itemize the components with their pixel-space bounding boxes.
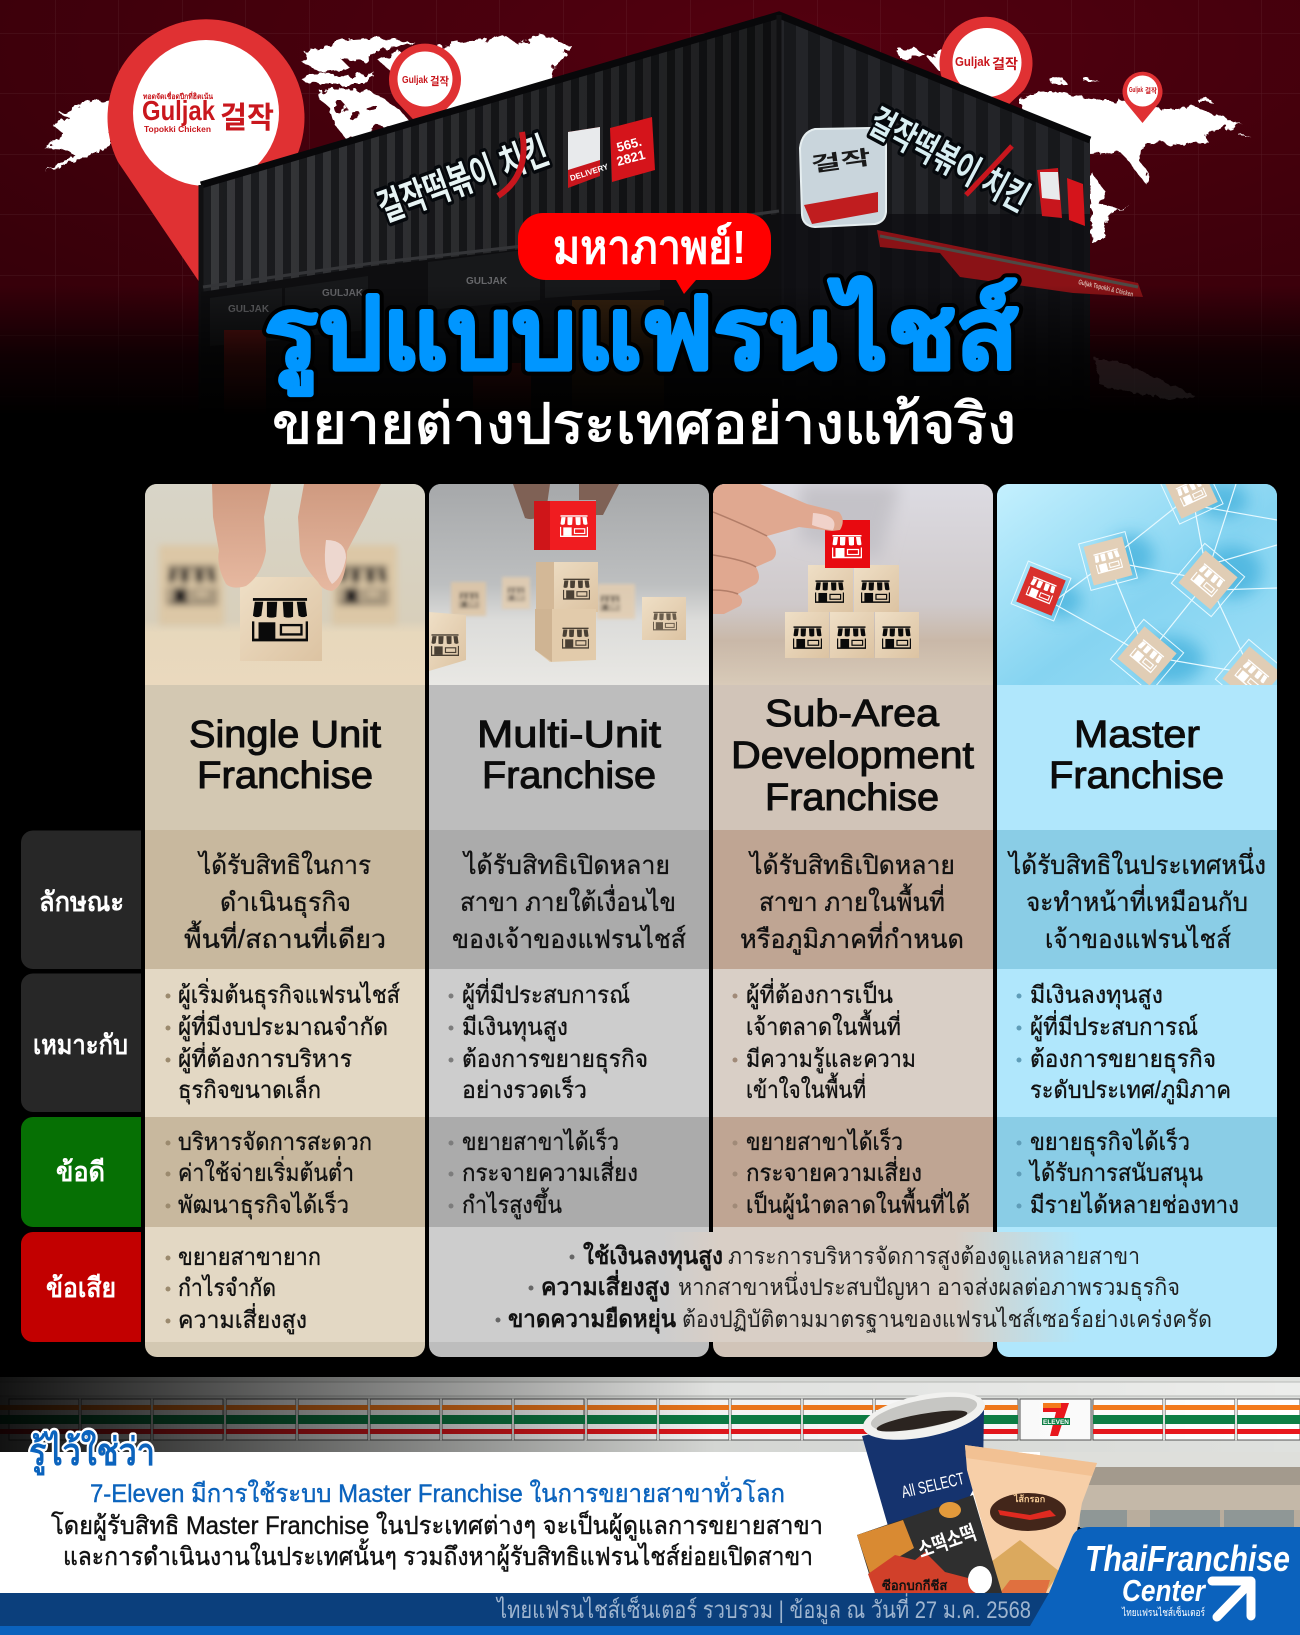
pros list: บริหารจัดการสะดวก xyxy=(178,1129,372,1156)
pros list xyxy=(1016,1127,1239,1219)
panel: Master Franchise column xyxy=(997,460,1289,1357)
info panel: did you know xyxy=(0,1430,1040,1593)
suitable-for list: ระดับประเทศ/ภูมิภาค xyxy=(1030,1077,1231,1105)
pin: large Guljak logo: Guljak xyxy=(142,95,215,126)
suitable-for list: ธุรกิจขนาดเล็ก xyxy=(178,1075,321,1105)
pin: small Guljak logo west: 걸작 xyxy=(430,75,449,88)
pros list: กำไรสูงขึ้น xyxy=(462,1187,562,1220)
right storefront sign: 걸작 xyxy=(809,146,872,177)
cons line 3 xyxy=(496,1306,1212,1335)
panel: Single Unit column xyxy=(145,484,425,1357)
logo: ThaiFranchise Center xyxy=(0,1527,1300,1635)
store building xyxy=(201,15,1143,415)
row label: characteristics xyxy=(21,830,141,969)
pros list: มีรายได้หลายช่องทาง xyxy=(1030,1191,1239,1219)
pin: large Guljak logo: Topokki Chicken xyxy=(144,124,211,134)
store building: GULJAK xyxy=(322,288,364,299)
characteristics text: สาขา ภายในพื้นที่ xyxy=(759,883,945,917)
characteristics text: เจ้าของแฟรนไชส์ xyxy=(1045,924,1231,954)
store building: GULJAK xyxy=(228,304,270,315)
suitable-for list xyxy=(1016,982,1231,1105)
callout: speech bubble xyxy=(518,213,771,294)
pin: large Guljak logo: ทอดจัดเชื่อดปีกที่ฮิตเน้น xyxy=(143,90,214,101)
photo: fingers placing block xyxy=(145,484,425,685)
heading: Master Franchise: Franchise xyxy=(1049,755,1224,797)
info line 3: และการดำเนินงานในประเทศนั้นๆ รวมถึงหาผู้รับสิทธิแฟรนไชส์ย่อยเปิดสาขา xyxy=(63,1538,813,1572)
heading: Master Franchise: Master xyxy=(1074,714,1200,756)
7-Eleven logo xyxy=(1042,1403,1070,1436)
suitable-for list: มีเงินทุนสูง xyxy=(462,1014,568,1042)
product: coffee cup xyxy=(859,1384,989,1526)
right storefront sign: 걸작떡볶이 치킨 xyxy=(862,101,1036,219)
characteristics text: หรือภูมิภาคที่กำหนด xyxy=(740,921,964,955)
pin: medium Guljak logo east: 걸작 xyxy=(992,56,1018,72)
characteristics text xyxy=(740,850,964,955)
suitable-for list: มีเงินลงทุนสูง xyxy=(1030,982,1163,1010)
row label: suitable for xyxy=(21,974,141,1112)
suitable-for list xyxy=(732,978,916,1104)
footer bar: source xyxy=(0,1593,1049,1626)
row label: pros xyxy=(21,1117,141,1227)
map holes xyxy=(335,101,378,120)
pros list xyxy=(166,1129,372,1220)
product: snack pack: ซีอกบกกีชีส xyxy=(882,1578,947,1593)
cons list: ขยายสาขายาก xyxy=(178,1244,321,1271)
pin: tiny Guljak logo: Guljak xyxy=(1129,87,1143,94)
pros list: เป็นผู้นำตลาดในพื้นที่ได้ xyxy=(746,1187,970,1220)
left storefront sign: DELIVERY xyxy=(569,162,610,183)
cons line 2 xyxy=(528,1269,1180,1302)
product: sandwich bag: ไส้กรอก xyxy=(1013,1493,1045,1504)
suitable-for list: ผู้ที่ต้องการเป็น xyxy=(746,978,893,1010)
7-Eleven logo: ELEVEN xyxy=(1043,1419,1069,1426)
pin: small Guljak logo west xyxy=(389,44,461,132)
info line 1: 7-Eleven มีการใช้ระบบ Master Franchise ในการขยายสาขาทั่วโลก xyxy=(90,1476,785,1508)
heading: Multi-Unit Franchise: Franchise xyxy=(482,755,656,797)
heading: Multi-Unit Franchise: Multi-Unit xyxy=(477,714,661,756)
pros list: ได้รับการสนับสนุน xyxy=(1028,1159,1203,1188)
characteristics text xyxy=(1007,847,1266,954)
suitable-for list xyxy=(448,978,648,1104)
merged cons panel for three columns xyxy=(429,1232,1277,1342)
left storefront sign: 걸작떡볶이 치킨 xyxy=(373,130,554,230)
suitable-for list: มีความรู้และความ xyxy=(746,1046,916,1074)
heading: Single Unit Franchise xyxy=(189,714,381,797)
cons line 1 xyxy=(570,1241,1140,1272)
row label: cons: ข้อเสีย xyxy=(46,1273,116,1303)
product: snack pack xyxy=(857,1495,1002,1594)
characteristics text xyxy=(184,850,386,954)
panel: Multi-Unit column xyxy=(429,484,709,1357)
suitable-for list: ต้องการขยายธุรกิจ xyxy=(462,1046,648,1074)
logo: ThaiFranchise Center: ไทยแฟรนไชส์เซ็นเตอร์ xyxy=(1121,1605,1205,1619)
cons line 3: ขาดความยืดหยุ่น xyxy=(508,1306,677,1335)
heading: Sub-Area Development Franchise: Sub-Area xyxy=(765,693,940,735)
red awning xyxy=(877,230,1143,297)
pros list xyxy=(732,1127,970,1220)
row label: cons xyxy=(21,1232,141,1342)
cons list: ความเสี่ยงสูง xyxy=(178,1303,307,1335)
product: sandwich bag xyxy=(965,1445,1097,1593)
heading: Single Unit Franchise: Franchise xyxy=(197,755,373,797)
suitable-for list: ผู้ที่มีประสบการณ์ xyxy=(462,978,630,1010)
suitable-for list xyxy=(166,978,400,1105)
title: รูปแบบแฟรนไชส์ xyxy=(264,277,1018,396)
pros list: ขยายธุรกิจได้เร็ว xyxy=(1030,1127,1190,1157)
suitable-for list: เข้าใจในพื้นที่ xyxy=(746,1072,866,1104)
cons list: กำไรจำกัด xyxy=(178,1274,276,1302)
suitable-for list: ผู้ที่มีงบประมาณจำกัด xyxy=(178,1010,388,1042)
logo: ThaiFranchise Center: Center xyxy=(1122,1573,1207,1608)
store building: GULJAK xyxy=(466,276,508,287)
heading: Sub-Area Development Franchise: Development xyxy=(731,735,974,777)
pin: small Guljak logo west: Guljak xyxy=(402,75,428,86)
heading: Sub-Area Development Franchise: Franchise xyxy=(765,777,939,819)
store building: Guljak Topokki & Chicken xyxy=(1078,279,1134,299)
pros list: ขยายสาขาได้เร็ว xyxy=(746,1127,903,1156)
product: coffee cup: All SELECT xyxy=(900,1469,966,1502)
pin: tiny Guljak logo: 걸작 xyxy=(1145,86,1158,95)
pin: medium Guljak logo east: Guljak xyxy=(955,54,991,69)
callout: speech bubble: มหาภาพย์! xyxy=(553,221,746,273)
photo: hand stacking pyramid of blocks xyxy=(713,484,993,662)
pros list: กระจายความเสี่ยง xyxy=(462,1156,638,1187)
store lower facade xyxy=(1030,1452,1300,1467)
cons list xyxy=(166,1244,321,1335)
pin: medium Guljak logo east xyxy=(940,17,1032,126)
suitable-for list: อย่างรวดเร็ว xyxy=(462,1075,587,1104)
characteristics text: พื้นที่/สถานที่เดียว xyxy=(184,920,386,954)
hero fade to black xyxy=(0,285,1300,415)
suitable-for list: ผู้เริ่มต้นธุรกิจแฟรนไชส์ xyxy=(178,978,400,1010)
heading: Master Franchise xyxy=(1049,714,1224,797)
characteristics text: ของเจ้าของแฟรนไชส์ xyxy=(452,924,686,954)
photo: stacked blocks xyxy=(429,484,709,685)
footer bar: source: ไทยแฟรนไชส์เซ็นเตอร์ รวบรวม | ข้อมูล ณ วันที่ 27 ม.ค. 2568 xyxy=(495,1593,1031,1625)
pros list: กระจายความเสี่ยง xyxy=(746,1156,922,1187)
footer photo: 7-Eleven store fascia xyxy=(0,1377,1300,1528)
characteristics text: จะทำหน้าที่เหมือนกับ xyxy=(1026,884,1248,917)
pros list: พัฒนาธุรกิจได้เร็ว xyxy=(178,1190,349,1220)
photo: network of blocks xyxy=(997,484,1277,685)
cons line 1: ภาระการบริหารจัดการสูงต้องดูแลหลายสาขา xyxy=(728,1243,1140,1270)
info line 2: โดยผู้รับสิทธิ Master Franchise ในประเทศต่างๆ จะเป็นผู้ดูแลการขยายสาขา xyxy=(51,1510,823,1541)
characteristics text: ได้รับสิทธิเปิดหลาย xyxy=(462,850,670,880)
characteristics text: สาขา ภายใต้เงื่อนไข xyxy=(460,884,676,917)
cons line 2: ความเสี่ยงสูง xyxy=(541,1269,670,1302)
pin: large Guljak logo: 걸작 xyxy=(220,102,274,135)
row label: suitable for: เหมาะกับ xyxy=(33,1030,128,1060)
left storefront sign: 565. xyxy=(615,134,643,155)
subtitle: ขยายต่างประเทศอย่างแท้จริง xyxy=(272,392,1016,455)
cons line 2: หากสาขาหนึ่งประสบปัญหา อาจส่งผลต่อภาพรวมธุรกิจ xyxy=(678,1271,1180,1301)
heading: Single Unit Franchise: Single Unit xyxy=(189,714,381,756)
pros list: ขยายสาขาได้เร็ว xyxy=(462,1127,619,1156)
product: snack pack: 소떡소떡 xyxy=(915,1521,979,1563)
heading: Sub-Area Development Franchise xyxy=(731,693,974,819)
icon: arrow xyxy=(1212,1581,1251,1617)
suitable-for list: ผู้ที่ต้องการบริหาร xyxy=(178,1042,352,1074)
row label: pros: ข้อดี xyxy=(56,1157,105,1187)
pros list xyxy=(448,1127,638,1220)
suitable-for list: เจ้าตลาดในพื้นที่ xyxy=(746,1009,901,1041)
world map xyxy=(45,34,1250,243)
hero panel: world map, pins and Guljak store xyxy=(0,0,1300,484)
suitable-for list: ต้องการขยายธุรกิจ xyxy=(1030,1046,1216,1074)
characteristics text xyxy=(452,850,686,954)
characteristics text: ได้รับสิทธิในการ xyxy=(197,850,371,880)
suitable-for list: ผู้ที่มีประสบการณ์ xyxy=(1030,1010,1198,1042)
pin: large Guljak logo xyxy=(107,19,305,292)
heading: Multi-Unit Franchise xyxy=(477,714,661,797)
left storefront sign: 2821 xyxy=(615,147,647,169)
panel: Sub-Area Development column xyxy=(713,484,993,1357)
pin: tiny Guljak logo xyxy=(1122,72,1162,123)
info heading: รู้ไว้ใช่ว่า xyxy=(29,1430,155,1476)
cons line 3: ต้องปฏิบัติตามมาตรฐานของแฟรนไชส์เซอร์อย่างเคร่งครัด xyxy=(682,1306,1212,1333)
cons line 1: ใช้เงินลงทุนสูง xyxy=(583,1241,723,1272)
characteristics text: ได้รับสิทธิในประเทศหนึ่ง xyxy=(1007,847,1266,880)
characteristics text: ดำเนินธุรกิจ xyxy=(220,887,351,918)
pros list: ค่าใช้จ่ายเริ่มต้นต่ำ xyxy=(178,1156,354,1187)
title: รูปแบบแฟรนไชส์ xyxy=(264,277,1018,396)
right storefront sign xyxy=(800,101,1085,227)
characteristics text: ได้รับสิทธิเปิดหลาย xyxy=(748,850,955,880)
row label: characteristics: ลักษณะ xyxy=(39,887,124,917)
